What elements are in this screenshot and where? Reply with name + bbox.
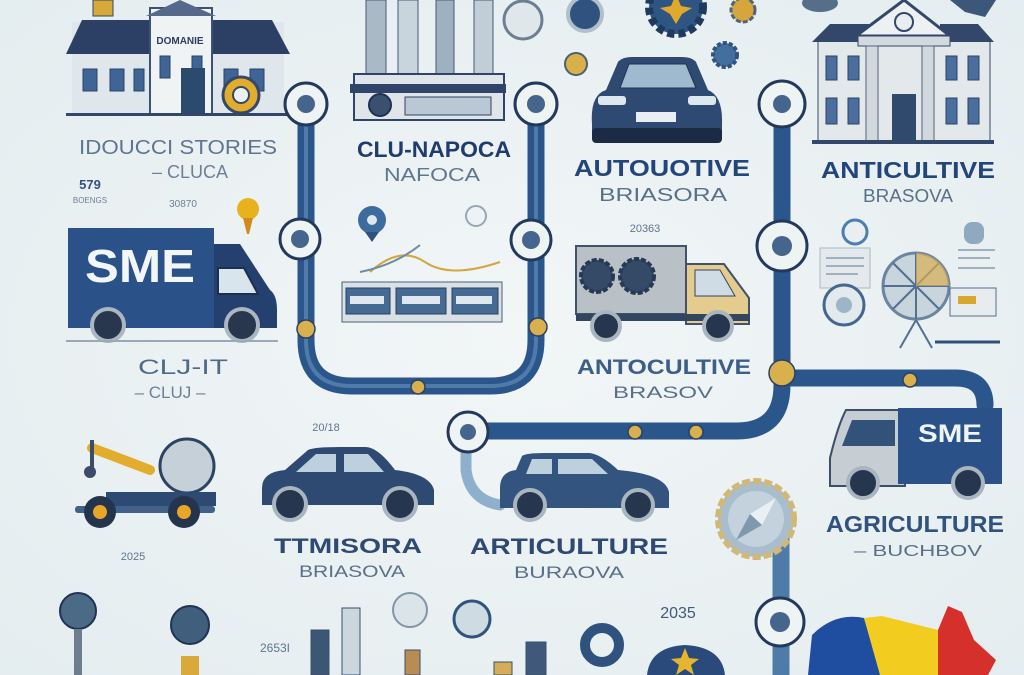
heading: stories cluca: [73, 137, 277, 210]
icon: romanian flag map: [808, 606, 996, 675]
icon: pin and map dashboard: [342, 206, 502, 322]
heading: stories cluca: IDOUCCI STORIES: [79, 137, 277, 159]
heading: articulture: [470, 534, 668, 582]
heading: stories cluca: 579: [79, 177, 101, 192]
heading: agriculture top right: BRASOVA: [863, 186, 953, 206]
heading: agriculture: AGRICULTURE: [826, 511, 1004, 537]
heading: agriculture top right: ANTICULTIVE: [821, 157, 995, 183]
heading: antocultive: ANTOCULTIVE: [577, 356, 751, 379]
icon: top-left building: [66, 0, 290, 116]
icon: SME van right: SME: [918, 420, 982, 448]
icon: SME van right: [830, 408, 1002, 498]
icon: blue car middle: [262, 447, 434, 520]
icon: SME truck left: SME: [85, 240, 195, 292]
heading: timisoara: 2025: [121, 551, 145, 563]
heading: agriculture: – BUCHBOV: [854, 543, 982, 560]
heading: timisoara: 20/18: [312, 422, 340, 434]
label: year above grey truck: 20363: [630, 223, 660, 235]
heading: stories cluca: 30870: [169, 199, 197, 210]
heading: cluj-napoca: CLU-NAPOCA: [357, 137, 511, 162]
panel: wind turbine and charts: [820, 220, 1000, 348]
heading: cluj-napoca: [357, 137, 511, 185]
heading: automotive: AUTOUOTIVE: [574, 155, 750, 181]
heading: agriculture top right: [821, 157, 995, 206]
heading: articulture: ARTICULTURE: [470, 534, 668, 559]
icon: factory: [350, 0, 506, 120]
heading: automotive: [574, 155, 750, 205]
icon: front view car: [592, 57, 722, 143]
icon: top gears: [504, 0, 996, 75]
bottom bar chart and gauges: 2653I: [260, 641, 290, 655]
icon: SME truck left: [66, 228, 278, 342]
bottom bar chart and gauges: 2035: [660, 605, 696, 622]
heading: timisoara: [121, 422, 422, 581]
pipeline route: [306, 120, 985, 675]
heading: timisoara: BRIASOVA: [299, 562, 406, 581]
icon: grey truck with gears: [576, 246, 750, 340]
heading: antocultive: [577, 356, 751, 402]
heading: articulture: BURAOVA: [514, 563, 625, 582]
icon: lightbulb: [237, 198, 259, 234]
bottom bar chart and gauges: [60, 593, 725, 675]
heading: cluj-it: – CLUJ –: [135, 383, 206, 402]
heading: automotive: BRIASORA: [599, 185, 727, 205]
heading: stories cluca: – CLUCA: [152, 162, 228, 182]
heading: cluj-napoca: NAFOCA: [384, 165, 480, 185]
heading: timisoara: TTMISORA: [274, 535, 422, 558]
icon: crane vehicle: [75, 439, 216, 528]
heading: stories cluca: BOENGS: [73, 196, 107, 205]
icon: blue suv: [500, 453, 669, 520]
heading: antocultive: BRASOV: [613, 383, 714, 402]
icon: compass gear: [718, 481, 794, 557]
icon: bank building: [812, 0, 994, 144]
route nodes: [280, 81, 917, 646]
heading: cluj-it: CLJ-IT: [138, 356, 228, 379]
heading: cluj-it: [135, 356, 228, 402]
icon: top-left building: DOMANIE: [156, 36, 204, 47]
heading: agriculture: [826, 511, 1004, 560]
